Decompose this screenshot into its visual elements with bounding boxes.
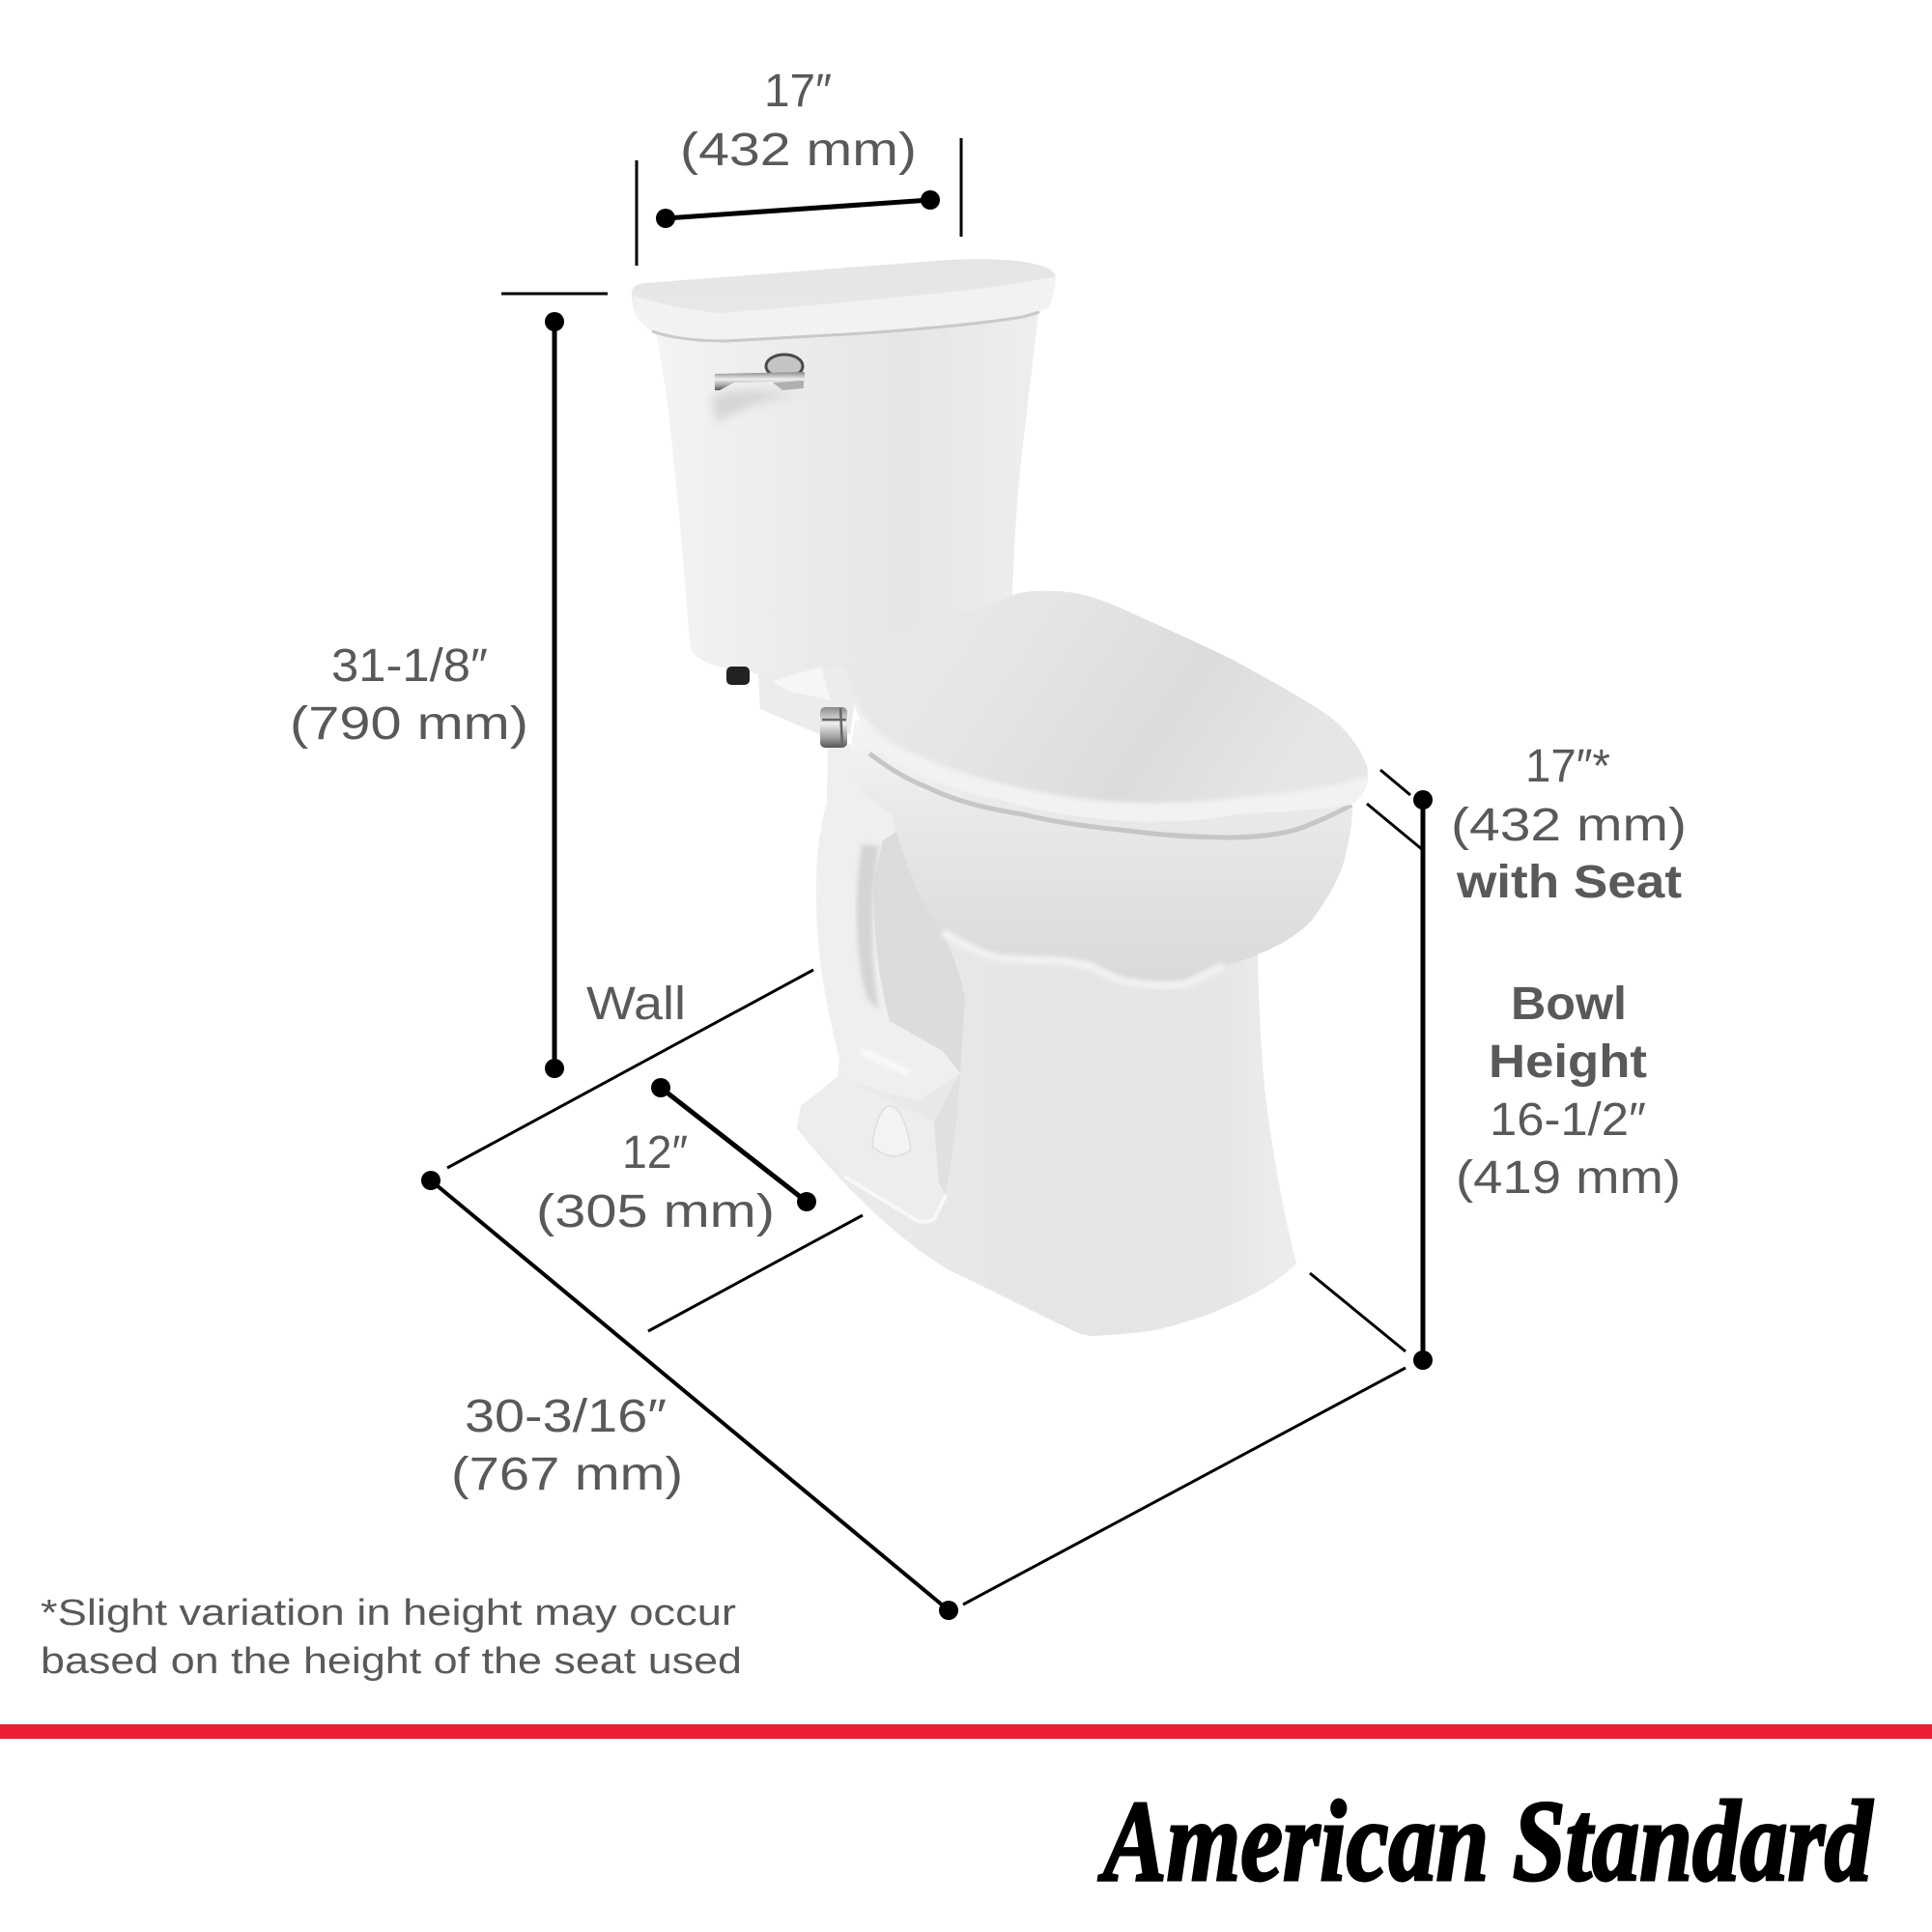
base plate	[797, 1077, 956, 1222]
black supply nub	[726, 667, 750, 685]
dimension: tank width	[637, 138, 961, 266]
label: tank width	[680, 66, 917, 176]
label: bowl height: 16-1/2″	[1490, 1094, 1646, 1146]
toilet seat lid	[820, 591, 1377, 831]
label: bowl height: Height	[1489, 1037, 1647, 1088]
toilet illustration	[632, 259, 1377, 1336]
label: overall depth	[451, 1391, 683, 1500]
label: height with seat: (432 mm)	[1451, 800, 1687, 851]
tank lid	[632, 259, 1056, 341]
label: bowl height: Bowl	[1511, 979, 1627, 1030]
bowl	[848, 720, 1352, 985]
flush handle	[715, 355, 805, 390]
dimension: rough-in	[651, 1078, 816, 1211]
label: overall height: (790 mm)	[290, 698, 528, 750]
label: rough-in: 12″	[622, 1127, 688, 1179]
dimension: overall depth	[421, 1171, 1406, 1620]
seat rim gray line	[869, 753, 1351, 838]
label: wall: Wall	[586, 979, 686, 1030]
label: height with seat: 17″*	[1525, 741, 1610, 792]
chrome hinge	[820, 707, 847, 748]
label: height with seat: with Seat	[1456, 857, 1682, 908]
trapway loop	[816, 744, 960, 1101]
footnote: based on the height of the seat used	[41, 1641, 742, 1682]
label: height with seat	[1451, 741, 1687, 908]
toilet base and pedestal	[797, 720, 1352, 1336]
lid front band	[633, 276, 1056, 341]
footnote	[41, 1593, 742, 1682]
label: bowl height: (419 mm)	[1456, 1152, 1681, 1204]
label: rough-in: (305 mm)	[536, 1186, 775, 1237]
handle shadow	[711, 390, 800, 423]
red divider bar	[0, 1724, 1932, 1739]
label: tank width: (432 mm)	[680, 125, 917, 176]
dimension: bowl height	[1310, 770, 1433, 1370]
side cutaway recess	[874, 829, 965, 1073]
label: rough-in	[536, 1127, 775, 1237]
label: overall depth: (767 mm)	[451, 1449, 683, 1500]
toilet tank	[632, 259, 1056, 735]
trapway inner shading	[857, 844, 879, 1010]
label: tank width: 17″	[764, 66, 832, 117]
dimension: overall height	[501, 294, 608, 1078]
footnote: *Slight variation in height may occur	[41, 1593, 736, 1634]
bowl pedestal junction highlight	[943, 932, 1224, 985]
label: overall height	[290, 640, 528, 750]
label: bowl height	[1456, 979, 1681, 1204]
dimension: wall lines	[447, 970, 863, 1331]
bolt cap	[872, 1106, 911, 1156]
label: overall depth: 30-3/16″	[465, 1391, 667, 1442]
seat edge highlight	[855, 705, 1368, 821]
connector piece	[758, 667, 860, 735]
label: overall height: 31-1/8″	[331, 640, 488, 692]
